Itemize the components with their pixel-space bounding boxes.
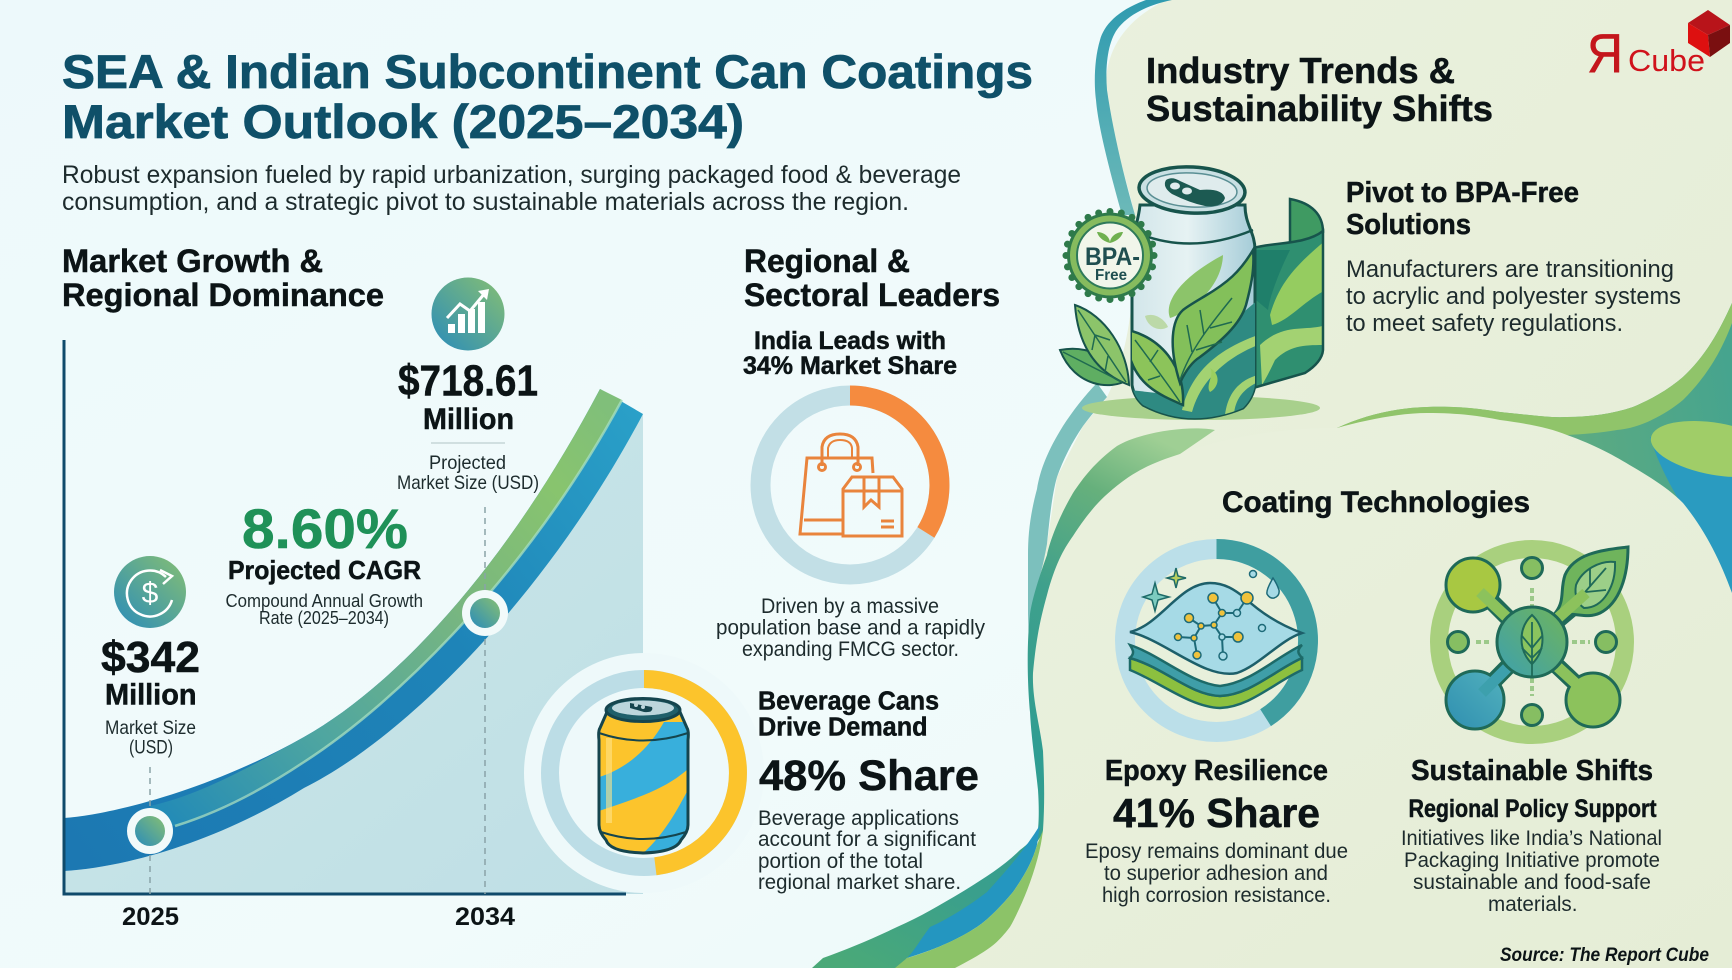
title: SEA & Indian Subcontinent Can Coatings [62, 45, 1033, 98]
text: India description: population base and a rapidly [716, 616, 985, 640]
shadow [1082, 396, 1320, 420]
stat: 342 million: Market Size [105, 717, 196, 739]
text: sustainable shifts: materials. [1488, 893, 1578, 916]
title: Market Outlook (2025–2034) [62, 95, 744, 148]
text: beverage cans [758, 688, 979, 894]
can body [1132, 205, 1255, 418]
icon: beverage can [596, 698, 692, 856]
dark wrap [1134, 302, 1255, 418]
stat: 342 million: (USD) [129, 736, 173, 758]
stat: 718.61 million: Market Size (USD) [397, 472, 539, 494]
point 2034 [462, 590, 508, 636]
donut: India 34% [760, 396, 940, 574]
stat: 718.61 million [397, 356, 539, 494]
badge: Free [1095, 267, 1127, 284]
chart: market growth curve [64, 340, 643, 931]
green band [150, 389, 622, 833]
faded leaf [1169, 255, 1223, 318]
stat: 342 million [101, 633, 200, 758]
text: epoxy resilience: to superior adhesion and [1104, 862, 1328, 885]
heading: regional leaders: Sectoral Leaders [744, 277, 1000, 313]
stat: CAGR: Projected CAGR [228, 555, 421, 585]
can rim [1138, 164, 1246, 216]
axes [64, 340, 626, 894]
area under curve [64, 414, 643, 894]
text: beverage cans: Beverage applications [758, 806, 959, 830]
icon: shopping bag and box [800, 434, 902, 536]
text: epoxy resilience [1085, 755, 1348, 907]
big leaf [1173, 250, 1253, 383]
badge [1066, 212, 1154, 300]
bottom white strip [0, 968, 1732, 980]
stat: CAGR [226, 497, 423, 628]
text: epoxy resilience: Eposy remains dominant due [1085, 840, 1348, 863]
logo: RCube: Я [1587, 22, 1623, 84]
text: epoxy resilience: high corrosion resistance. [1102, 884, 1331, 907]
heading: India share: 34% Market Share [743, 352, 957, 380]
stat: 718.61 million: Projected [429, 452, 506, 474]
icon: coating layers [1130, 568, 1302, 708]
background shapes: right beige panel and ribbons [812, 0, 1732, 968]
blue band [64, 389, 643, 871]
stat: 342 million: Million [105, 678, 196, 712]
stat: 718.61 million: $718.61 [398, 356, 538, 406]
stat: 342 million: $342 [101, 633, 200, 682]
film front [1256, 234, 1322, 386]
text: sustainable shifts: Regional Policy Support [1408, 795, 1657, 823]
heading: regional leaders: Regional & [744, 243, 910, 279]
badge: BPA- [1085, 243, 1140, 271]
heading: regional leaders [744, 243, 1000, 313]
text: sustainable shifts: Sustainable Shifts [1411, 755, 1653, 787]
heading: market growth [62, 243, 384, 313]
heading: industry trends [1146, 50, 1493, 129]
text: BPA-free pivot: Manufacturers are transitioning [1346, 256, 1674, 283]
stat: CAGR: 8.60% [242, 497, 408, 560]
text: India description: expanding FMCG sector. [742, 637, 959, 661]
text: India description: Driven by a massive [761, 594, 939, 618]
stat: CAGR: Compound Annual Growth [226, 591, 423, 611]
text: BPA-free pivot: Pivot to BPA-Free [1346, 177, 1579, 209]
logo: RCube: Cube [1628, 43, 1705, 78]
axis labels [122, 903, 515, 931]
text: sustainable shifts [1401, 755, 1662, 916]
text: beverage cans: Beverage Cans [758, 688, 939, 716]
icon: dollar cycle [114, 556, 186, 628]
title [62, 45, 1033, 148]
text: BPA-free pivot: Solutions [1346, 209, 1471, 241]
text: beverage cans: 48% Share [759, 752, 979, 800]
left leaf [1128, 330, 1183, 405]
text: beverage cans: regional market share. [758, 870, 961, 894]
subtitle: Robust expansion fueled by rapid urbanization, surging packaged food & beverage [62, 161, 961, 189]
stat: CAGR: Rate (2025–2034) [259, 608, 389, 628]
icon: sustainable molecule [1439, 547, 1628, 735]
text: beverage cans: account for a significant [758, 827, 976, 851]
text: epoxy resilience: Epoxy Resilience [1105, 755, 1328, 787]
icon: dollar cycle: $ [142, 577, 159, 610]
donut: epoxy 41% [1125, 549, 1308, 732]
text: beverage cans: Drive Demand [758, 714, 928, 742]
text: epoxy resilience: 41% Share [1113, 790, 1320, 836]
panel: coating technologies dome [955, 413, 1732, 968]
heading: market growth: Regional Dominance [62, 277, 384, 313]
icon: rising chart [432, 278, 504, 350]
text: sustainable shifts: Initiatives like India’s National [1401, 827, 1662, 850]
heading: India share [743, 327, 957, 380]
text: sustainable shifts: Packaging Initiative promote [1404, 849, 1660, 872]
text: India description [716, 594, 985, 661]
axis labels: 2034 [455, 903, 515, 931]
text: BPA-free pivot [1346, 177, 1681, 337]
text: BPA-free pivot: to meet safety regulations. [1346, 310, 1623, 337]
axis labels: 2025 [122, 903, 179, 931]
donut: beverage 48% [524, 653, 764, 893]
text: sustainable shifts: sustainable and food-safe [1413, 871, 1651, 894]
heading: market growth: Market Growth & [62, 243, 323, 279]
text: BPA-free pivot: to acrylic and polyester systems [1346, 283, 1681, 310]
illustration: BPA-free can [1060, 164, 1330, 425]
heading: industry trends: Sustainability Shifts [1146, 88, 1493, 129]
subtitle: consumption, and a strategic pivot to sustainable materials across the region. [62, 188, 909, 216]
heading: coating technologies: Coating Technologies [1222, 486, 1530, 519]
source note: Source: The Report Cube [1500, 945, 1709, 966]
heading: India share: India Leads with [754, 327, 946, 355]
leaves outer [1060, 349, 1127, 385]
subtitle [62, 161, 961, 216]
heading: industry trends: Industry Trends & [1146, 50, 1455, 91]
point 2025 [127, 808, 173, 854]
logo: RCube [1587, 10, 1730, 84]
text: beverage cans: portion of the total [758, 849, 923, 873]
stat: 718.61 million: Million [423, 403, 514, 436]
film back [1290, 199, 1323, 243]
